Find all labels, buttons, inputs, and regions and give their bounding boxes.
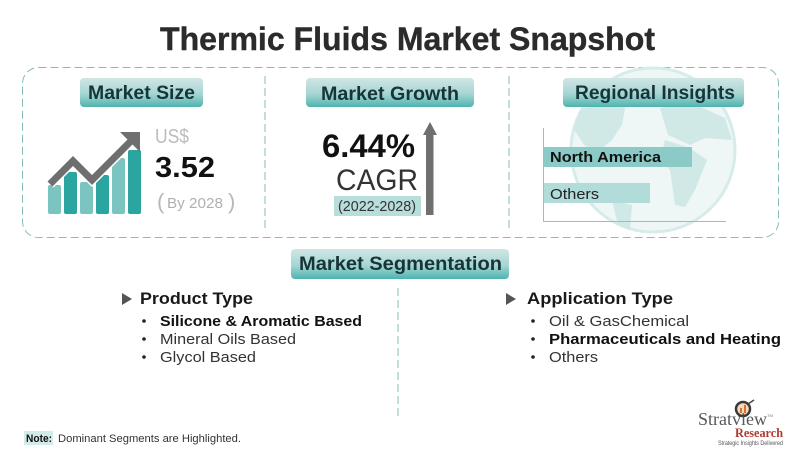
bar: North America: North America: [550, 149, 662, 166]
heading: market size: Market Size: [88, 83, 195, 104]
list: product types: Silicone & Aromatic Based: [160, 313, 362, 330]
panel: summary frame: [22, 68, 778, 238]
list: application types: Pharmaceuticals and Heating: [549, 331, 781, 348]
text: market size value: 3.52: [155, 152, 215, 184]
heading: product type: Product Type: [140, 289, 253, 308]
note: Note:: [26, 433, 52, 445]
list: application types: [531, 313, 781, 366]
heading: regional insights: [563, 78, 744, 107]
panel: regional insights: [543, 68, 744, 232]
panel: application type: [506, 289, 781, 366]
note: Dominant Segments are Highlighted.: [58, 433, 241, 445]
heading: regional insights: Regional Insights: [575, 83, 735, 104]
logo: Stratview Research: TM: [767, 413, 773, 418]
icon: arrow bullet: [122, 293, 132, 305]
text: year: By 2028: [167, 195, 223, 212]
text: CAGR label: CAGR: [336, 164, 418, 197]
text: currency: US$: [155, 126, 189, 148]
arrow: growth: [423, 122, 437, 215]
heading: market segmentation: Market Segmentation: [299, 254, 502, 275]
logo: Stratview Research: Stratview: [698, 409, 767, 429]
title: Thermic Fluids Market Snapshot: [160, 21, 655, 57]
icon: globe watermark: [571, 68, 735, 232]
logo: Stratview Research: Strategic Insights Delivered: [718, 441, 783, 447]
logo: Stratview Research: [698, 400, 784, 447]
heading: market size: [80, 78, 203, 107]
logo: Stratview Research: Research: [735, 425, 784, 440]
bar: North America: [544, 147, 692, 167]
text: year: ): [228, 189, 235, 214]
list: application types: Others: [549, 349, 598, 366]
list: application types: Oil & GasChemical: [549, 313, 689, 330]
panel: product type: [122, 289, 362, 366]
bar: Others: [544, 183, 650, 203]
icon: growth bar chart with arrow: [48, 132, 141, 214]
bar: Others: Others: [550, 186, 599, 203]
panel: market size: [48, 78, 235, 214]
icon: arrow bullet: [506, 293, 516, 305]
heading: market segmentation: [291, 249, 509, 279]
text: CAGR value: 6.44%: [322, 128, 415, 164]
text: year: (: [157, 189, 165, 214]
heading: market growth: Market Growth: [321, 84, 459, 105]
list: product types: [142, 313, 362, 366]
heading: market growth: [306, 78, 474, 107]
bar chart: regions: [543, 128, 726, 222]
text: year: [157, 189, 235, 214]
panel: market growth: [306, 78, 474, 216]
text: period: (2022-2028): [338, 198, 416, 215]
list: product types: Mineral Oils Based: [160, 331, 296, 348]
list: product types: Glycol Based: [160, 349, 256, 366]
heading: application type: Application Type: [527, 289, 673, 308]
